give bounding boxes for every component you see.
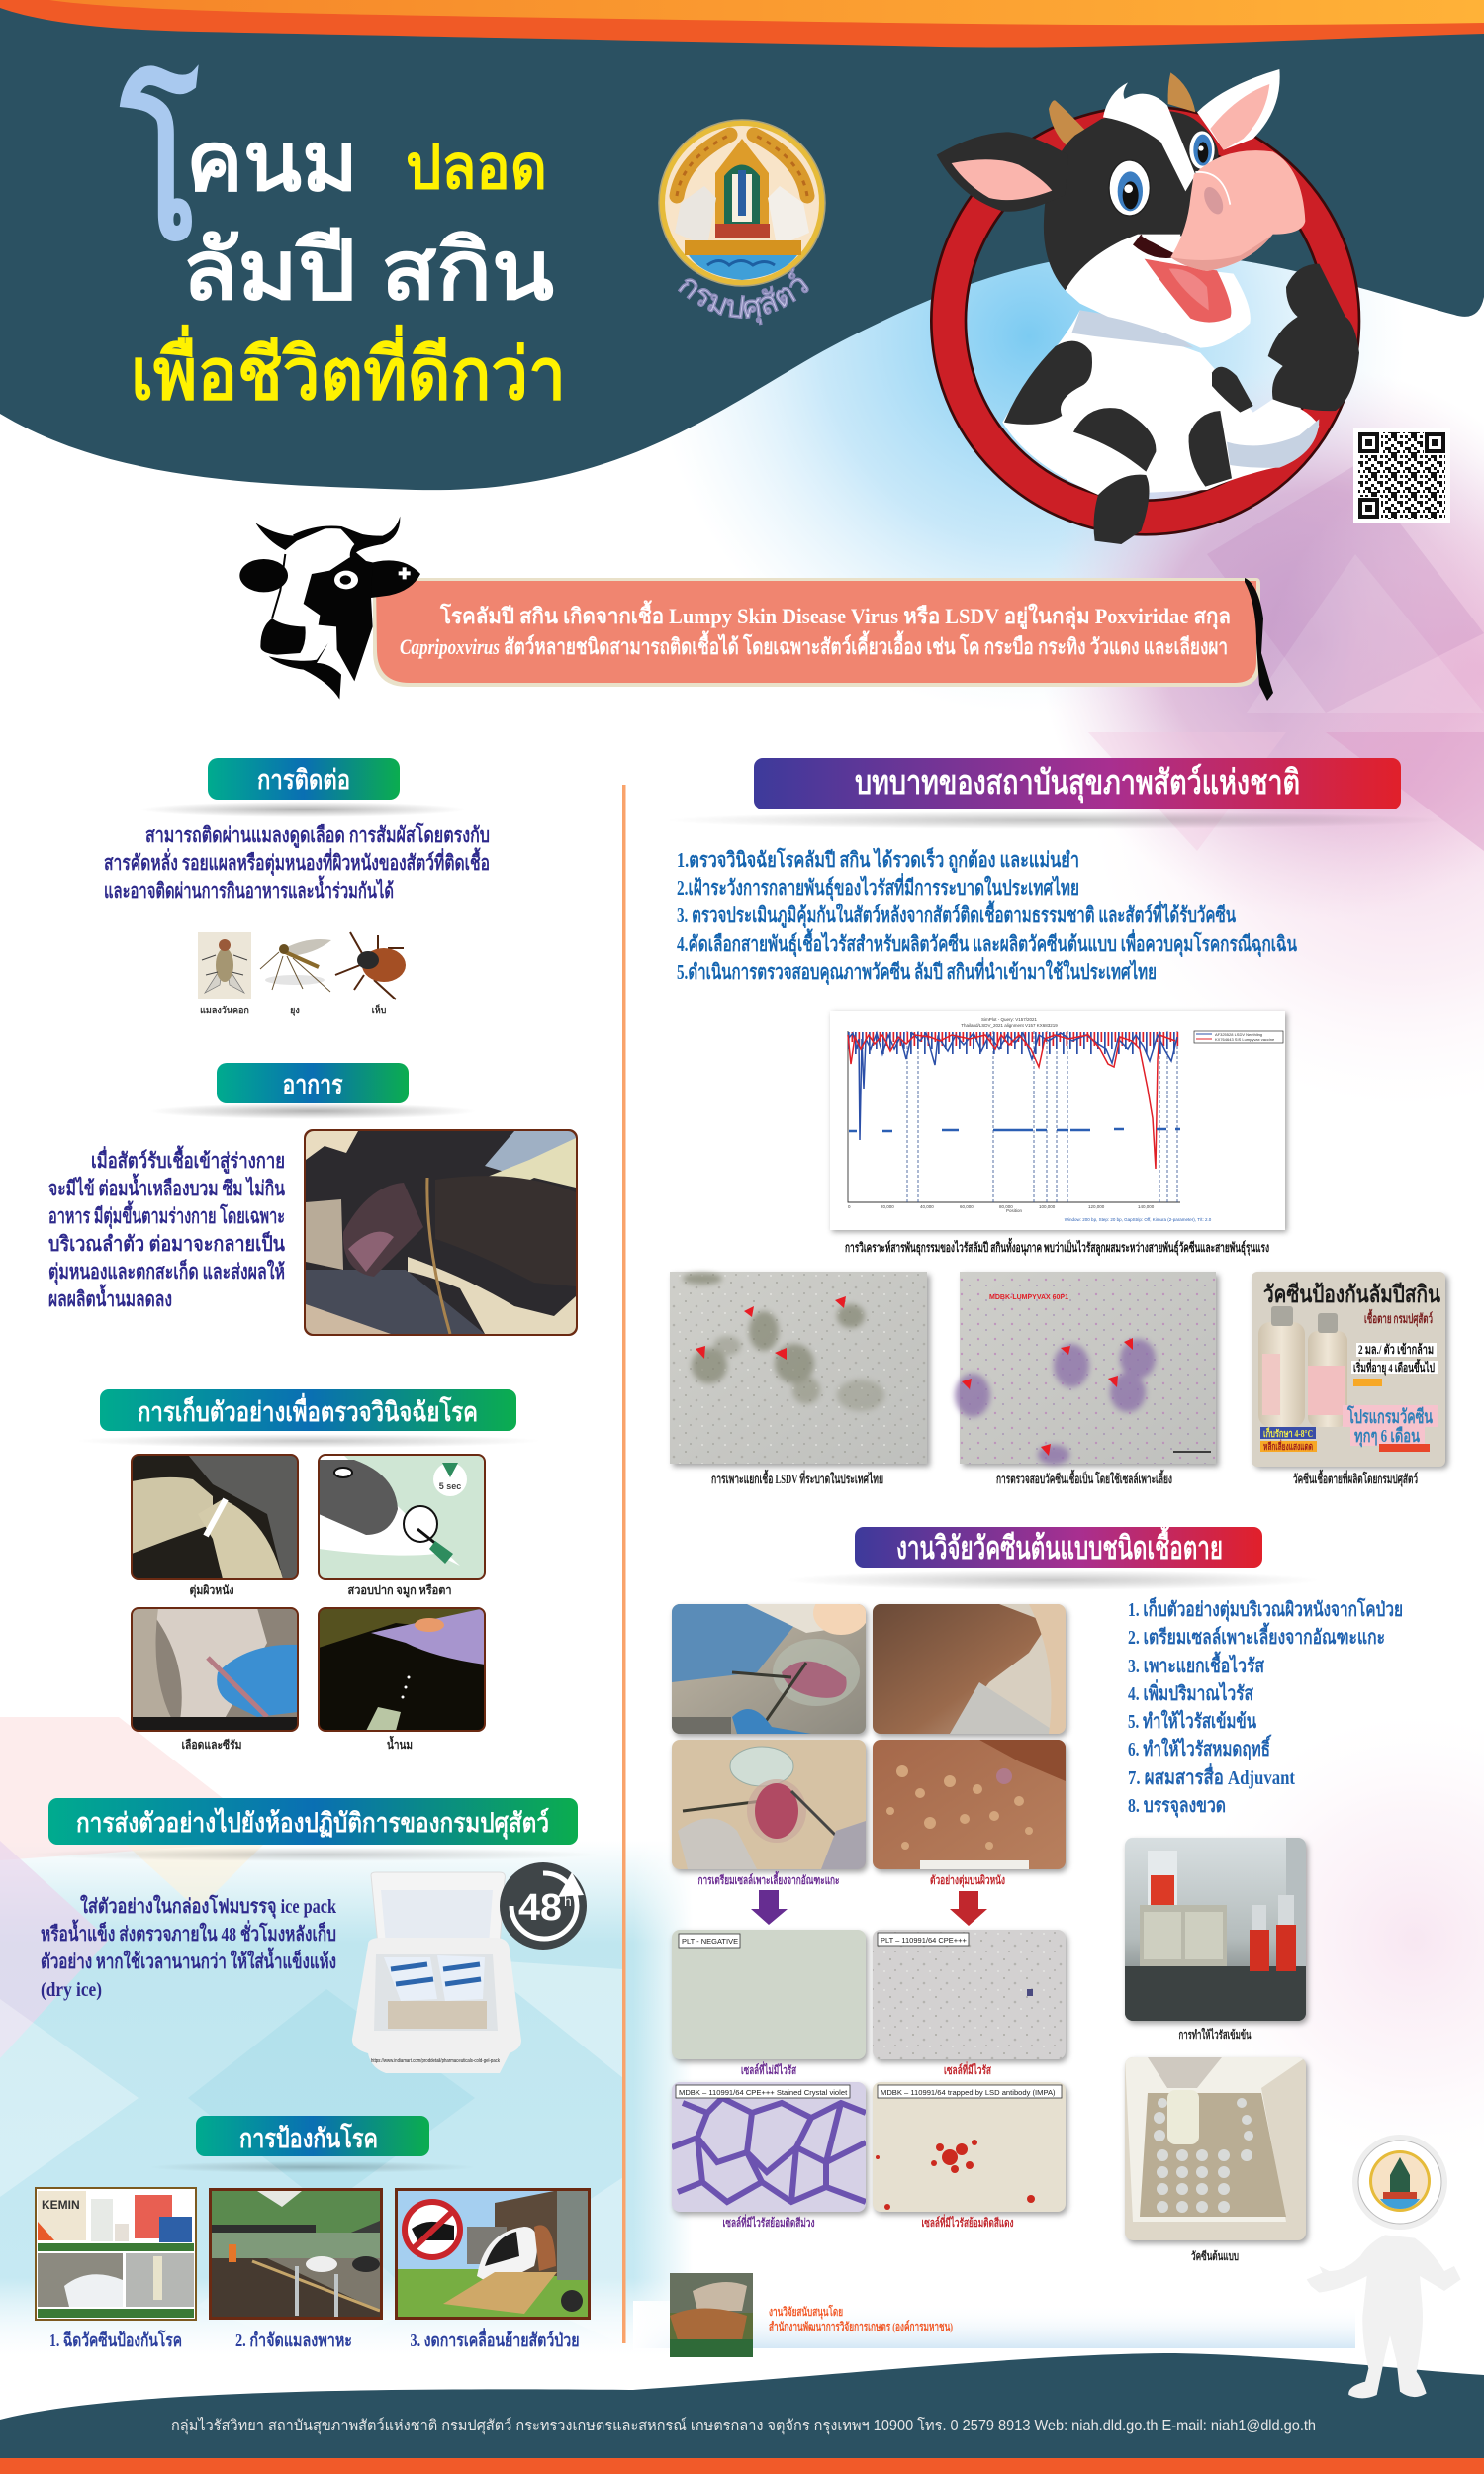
shipping text: (dry ice): [41, 1979, 102, 2001]
chart: axis labels: 60,000: [960, 1204, 974, 1209]
photo: PLT CPE cells: [873, 1930, 1066, 2059]
photo: inactivated vaccine poster: เริ่มที่อายุ 4 เดือนขึ้นไป: [1353, 1358, 1435, 1376]
heading: sample collection: [76, 1389, 541, 1448]
chart: genome similarity plot: [830, 1011, 1287, 1232]
photo: testis on dish with scissors: [672, 1740, 866, 1869]
chart: legend: AF325528 LSDV Neethling: [1215, 1032, 1262, 1037]
photo: inactivated vaccine poster: เก็บรักษา 4-8°C: [1263, 1426, 1313, 1440]
sample captions: เลือดและซีรัม: [182, 1738, 241, 1752]
photo: skin nodules close-up: [873, 1740, 1066, 1869]
shipping text: หรือน้ำแข็ง ส่งตรวจภายใน 48 ชั่วโมงหลังเก็บ: [41, 1919, 336, 1946]
research captions row 2: ตัวอย่างตุ่มบนผิวหนัง: [930, 1873, 1005, 1888]
micrograph captions: วัคซีนเชื้อตายที่ผลิตโดยกรมปศุสัตว์: [1293, 1469, 1418, 1487]
photo: IMPA stained cells: [873, 2082, 1066, 2212]
heading: transmission: [139, 758, 466, 817]
mascot head badge: [1352, 2135, 1447, 2230]
symptoms text: [48, 1145, 286, 1311]
chart: legend: [1194, 1031, 1283, 1043]
shipping text: [41, 1894, 337, 2001]
photo: inactivated vaccine poster: วัคซีนป้องกันลัมปีสกิน: [1263, 1282, 1440, 1308]
research step list: 1. เก็บตัวอย่างตุ่มบริเวณผิวหนังจากโคป่วย: [1128, 1596, 1403, 1622]
institute role list: 1.ตรวจวินิจฉัยโรคลัมปี สกิน ได้รวดเร็ว ถูกต้อง และแม่นยำ: [677, 846, 1079, 874]
insect captions: เห็บ: [372, 1003, 387, 1015]
chart: axis labels: 100,000: [1039, 1204, 1056, 1209]
icon: 48 hours clock: [500, 1862, 587, 1950]
sample captions: สวอบปาก จมูก หรือตา: [348, 1583, 451, 1598]
symptoms text: ผลผลิตน้ำนมลดลง: [48, 1284, 172, 1311]
icon: tick: [335, 932, 406, 999]
research captions row 4: เซลล์ที่มีไวรัสย้อมติดสีแดง: [922, 2214, 1014, 2230]
photo: PLT negative cells: [672, 1930, 866, 2059]
photo: vaccine CPE micrograph: [955, 1272, 1219, 1467]
title: ปลอด: ปลอด: [406, 134, 547, 202]
cow hoof: [1094, 475, 1150, 544]
micrograph captions: [711, 1469, 1418, 1487]
photo: sick cow with nodules: [873, 1604, 1066, 1734]
chart: legend: KX764643 SIS Lumpyvax vaccine: [1215, 1037, 1275, 1042]
photo: inactivated vaccine poster: [1252, 1272, 1448, 1469]
funding note: [769, 2304, 953, 2333]
sample captions: ตุ่มผิวหนัง: [190, 1583, 234, 1598]
footer: [0, 2353, 1484, 2474]
title: large letter โ: โ: [119, 63, 200, 277]
research step list: 5. ทำให้ไวรัสเข้มข้น: [1128, 1709, 1256, 1733]
photo: inactivated vaccine poster: เชื้อตาย กรมปศุสัตว์: [1364, 1308, 1433, 1327]
red arrows: [696, 1296, 846, 1360]
panel text line 1: โรคลัมปี สกิน เกิดจากเชื้อ Lumpy Skin Disease Virus หรือ LSDV อยู่ในกลุ่ม Poxviridae สกุล: [439, 600, 1231, 630]
photo: inactivated vaccine poster: หลีกเลี่ยงแสงแดด: [1263, 1439, 1313, 1453]
insect captions: แมลงวันคอก: [200, 1005, 249, 1015]
transmission text: สารคัดหลั่ง รอยแผลหรือตุ่มหนองที่ผิวหนังของสัตว์ที่ติดเชื้อ: [104, 847, 490, 877]
cow hand thumbs up: [1268, 264, 1359, 411]
institute role list: 5.ดำเนินการตรวจสอบคุณภาพวัคซีน ลัมปี สกินที่นำเข้ามาใช้ในประเทศไทย: [677, 956, 1157, 986]
panel: sample collection: [76, 1389, 541, 1752]
photo: PLT CPE cells: PLT – 110991/64 CPE+++: [881, 1936, 968, 1945]
chart: blue segments: [849, 1129, 1180, 1131]
research step list: 7. ผสมสารสื่อ Adjuvant: [1128, 1762, 1295, 1789]
cow chest and chin: [1066, 235, 1251, 348]
prevention captions: 3. งดการเคลื่อนย้ายสัตว์ป่วย: [410, 2328, 580, 2350]
photo: vaccine products: KEMIN: [42, 2198, 80, 2212]
icon: 48 hours clock: h: [564, 1893, 572, 1909]
research captions row 2: การเตรียมเซลล์เพาะเลี้ยงจากอัณฑะแกะ: [698, 1870, 839, 1887]
chart: axis labels: [848, 1017, 1212, 1222]
photo: insect control at farm: [209, 2188, 383, 2320]
heading: vaccine research: [786, 1524, 1320, 1590]
photo: foam box: [352, 1872, 521, 2073]
chart: axis labels: SimPlot - Query: V157/2021: [981, 1017, 1038, 1022]
institute role list: 3. ตรวจประเมินภูมิคุ้มกันในสัตว์หลังจากสัตว์ติดเชื้อตามธรรมชาติ และสัตว์ที่ได้รับวัคซีน: [677, 900, 1236, 929]
chart: dense similarity trace band: [848, 1032, 1180, 1058]
chart: axis labels: Window: 200 bp, Step: 20 bp, GapStrip: Off, Kimura (2-parameter), T/t: 2.0: [1065, 1217, 1212, 1222]
photo: inactivated vaccine poster: ทุกๆ 6 เดือน: [1354, 1426, 1421, 1448]
chart: axis labels: 140,000: [1138, 1204, 1155, 1209]
photo: swab diagram: [319, 1455, 485, 1579]
caption: virus concentration: การทำให้ไวรัสเข้มข้น: [1179, 2027, 1252, 2042]
heading: shipping: การส่งตัวอย่างไปยังห้องปฏิบัติการของกรมปศุสัตว์: [76, 1807, 549, 1840]
icon: fly: [198, 932, 251, 999]
cow left ear: [937, 132, 1068, 212]
photo: crystal violet stained cells: [672, 2082, 866, 2212]
research captions row 4: เซลล์ที่มีไวรัสย้อมติดสีม่วง: [722, 2214, 815, 2230]
insect captions: ยุง: [290, 1005, 300, 1016]
chart: axis labels: Thailand/LSDV_2021 alignment V157 KX683219: [961, 1023, 1058, 1028]
photo: milk sample: [319, 1608, 485, 1731]
photo: inactivated vaccine poster: โปรแกรมวัคซีน: [1346, 1405, 1433, 1428]
symptoms text: จะมีไข้ ต่อมน้ำเหลืองบวม ซึม ไม่กิน: [48, 1173, 285, 1200]
shipping text: ใส่ตัวอย่างในกล่องโฟมบรรจุ ice pack: [80, 1894, 337, 1919]
heading: symptoms: [149, 1063, 476, 1119]
photo: swab diagram: 5 sec: [439, 1481, 461, 1491]
chart: vertical markers: [907, 1031, 1177, 1202]
chart: axis labels: 20,000: [881, 1204, 894, 1209]
panel: inactivated vaccine research: [670, 1524, 1403, 2357]
symptoms text: บริเวณลำตัว ต่อมาจะกลายเป็น: [48, 1230, 286, 1256]
photo: prototype vaccine vials: [1125, 2057, 1306, 2240]
chart: axis labels: 120,000: [1088, 1204, 1105, 1209]
cow horns: [1049, 72, 1195, 151]
logo: arc text: กรมปศุสัตว์: [678, 267, 809, 325]
photo: vaccine CPE micrograph: MDBK-LUMPYVAX 60P1: [989, 1294, 1068, 1301]
mascot body: [1307, 2235, 1461, 2398]
header: orange band: [0, 0, 1484, 48]
institute role list: 2.เฝ้าระวังการกลายพันธุ์ของไวรัสที่มีการระบาดในประเทศไทย: [677, 872, 1079, 902]
icon: mosquito: [260, 939, 331, 992]
salmon text panel: [373, 578, 1260, 687]
heading: symptoms: อาการ: [283, 1070, 343, 1099]
shipping text: ตัวอย่าง หากใช้เวลานานกว่า ให้ใส่น้ำแข็งแห้ง: [41, 1947, 336, 1973]
photo: blood collection: [132, 1608, 298, 1731]
research step list: 2. เตรียมเซลล์เพาะเลี้ยงจากอัณฑะแกะ: [1128, 1622, 1385, 1649]
vaccine bottles: [1258, 1306, 1347, 1427]
funding note: งานวิจัยสนับสนุนโดย: [769, 2304, 843, 2320]
arrow: purple down: [751, 1890, 788, 1925]
intro panel with cow silhouette: [239, 517, 1273, 701]
research step list: 6. ทำให้ไวรัสหมดฤทธิ์: [1128, 1734, 1272, 1760]
cow body: [1002, 310, 1319, 495]
heading: transmission: การติดต่อ: [257, 765, 350, 795]
symptoms text: อาหาร มีตุ่มขึ้นตามร่างกาย โดยเฉพาะ: [48, 1200, 285, 1230]
title: ลัมปี สกิน: ลัมปี สกิน: [182, 224, 554, 317]
photo: inactivated vaccine poster: 2 มล./ ตัว เข้ากล้าม: [1358, 1342, 1434, 1357]
research captions row 3: เซลล์ที่มีไวรัส: [944, 2061, 991, 2077]
transmission text: สามารถติดผ่านแมลงดูดเลือด การสัมผัสโดยตรงกับ: [145, 822, 490, 849]
cow tongue and mouth: [1133, 235, 1231, 323]
vertical divider: [622, 785, 625, 2343]
panel text line 2: Capripoxvirus สัตว์หลายชนิดสามารถติดเชื้อได้ โดยเฉพาะสัตว์เคี้ยวเอื้อง เช่น โค กระบือ กระทิง วัวแดง และเลียงผา: [400, 630, 1228, 659]
heading: institute role: [666, 758, 1447, 829]
caption: prototype vaccine: วัคซีนต้นแบบ: [1191, 2249, 1239, 2263]
photo: IMPA stained cells: MDBK – 110991/64 trapped by LSD antibody (IMPA): [881, 2088, 1056, 2097]
micrograph captions: การตรวจสอบวัคซีนเชื้อเป็น โดยใช้เซลล์เพาะเลี้ยง: [996, 1469, 1172, 1486]
research captions row 3: เซลล์ที่ไม่มีไวรัส: [741, 2061, 796, 2077]
photo frames: [132, 1455, 485, 1731]
photo: virus concentration equipment: [1125, 1838, 1306, 2021]
photo: foam box: https://www.indiamart.com/proddetail/pharmaceuticals-cold-gel-pack: [371, 2058, 500, 2064]
symptoms text: ตุ่มหนองและตกสะเก็ด และส่งผลให้: [48, 1258, 285, 1285]
research step list: 4. เพิ่มปริมาณไวรัส: [1128, 1678, 1254, 1705]
cow forehead blaze: [1103, 82, 1195, 191]
chart: blue series: [848, 1033, 1177, 1140]
arrow: red down: [950, 1891, 987, 1926]
panel: symptoms: [48, 1063, 578, 1336]
chart: axis labels: 0: [848, 1204, 851, 1209]
title: เพื่อชีวิตที่ดีกว่า: เพื่อชีวิตที่ดีกว่า: [131, 324, 566, 415]
transmission text: และอาจติดผ่านการกินอาหารและน้ำร่วมกันได้: [104, 875, 394, 903]
heading: prevention: [149, 2116, 476, 2173]
photo: virus isolation micrograph: [670, 1272, 930, 1467]
photo: crystal violet stained cells: MDBK – 110991/64 CPE+++ Stained Crystal violet: [679, 2088, 848, 2097]
logo: department of livestock seal: [658, 119, 826, 325]
chart: axis labels: Position: [1006, 1208, 1022, 1213]
sample captions: น้ำนม: [387, 1735, 413, 1752]
heading: institute role: บทบาทของสถาบันสุขภาพสัตว์แห่งชาติ: [855, 763, 1300, 804]
research captions row 2: [698, 1870, 1005, 1888]
photo shadows: [674, 1607, 1308, 2243]
red ring: [949, 124, 1343, 518]
photo: PLT negative cells: PLT - NEGATIVE: [682, 1937, 738, 1946]
cow snout: [1170, 150, 1305, 271]
chart: axis labels: 80,000: [999, 1204, 1013, 1209]
icon: 48 hours clock: 48: [518, 1887, 562, 1929]
sample captions: [182, 1583, 451, 1752]
mascot with logo head: [1307, 2135, 1461, 2398]
header: dark teal wave: [0, 0, 1484, 490]
footer contact text: กลุ่มไวรัสวิทยา สถาบันสุขภาพสัตว์แห่งชาติ กรมปศุสัตว์ กระทรวงเกษตรและสหกรณ์ เกษตรกลาง จตุจักร กรุงเทพฯ 10900 โทร. 0 2579 8913 Web: niah.dld.go.th E-mail: niah1@dld.go.th: [171, 2417, 1316, 2435]
cow right ear: [1197, 69, 1280, 150]
panel: role of the institute: [666, 758, 1448, 1487]
prevention captions: 1. ฉีดวัคซีนป้องกันโรค: [49, 2330, 182, 2350]
chart: red series: [848, 1035, 1175, 1169]
prevention captions: [49, 2328, 580, 2350]
transmission text: [104, 822, 490, 903]
cow head: [1044, 111, 1219, 290]
heading: sample collection: การเก็บตัวอย่างเพื่อตรวจวินิจฉัยโรค: [138, 1392, 478, 1427]
symptoms text: เมื่อสัตว์รับเชื้อเข้าสู่ร่างกาย: [91, 1145, 285, 1175]
title: [119, 63, 566, 415]
insect captions: [200, 1003, 387, 1016]
heading: vaccine research: งานวิจัยวัคซีนต้นแบบชนิดเชื้อตาย: [896, 1524, 1223, 1566]
photo: vaccine products: [36, 2188, 196, 2320]
research captions row 4: [722, 2214, 1014, 2230]
panel: prevention: [36, 2116, 591, 2350]
photo: funding cover: [670, 2273, 753, 2357]
research captions row 3: [741, 2061, 991, 2077]
research step list: [1128, 1596, 1403, 1818]
photo: testis dissection in petri dish: [672, 1604, 866, 1734]
research step list: 3. เพาะแยกเชื้อไวรัส: [1128, 1651, 1265, 1677]
heading: shipping: [26, 1798, 600, 1861]
QR code: [1353, 428, 1450, 523]
institute role list: [677, 846, 1297, 986]
prevention captions: 2. กำจัดแมลงพาหะ: [235, 2331, 352, 2350]
funding note: สำนักงานพัฒนาการวิจัยการเกษตร (องค์การมหาชน): [769, 2320, 953, 2333]
cow silhouette head: [239, 517, 420, 700]
panel: shipping samples: [26, 1798, 600, 2073]
panel: transmission: [104, 758, 490, 1016]
photo: infected cow: [304, 1129, 578, 1336]
micrograph captions: การเพาะแยกเชื้อ LSDV ที่ระบาดในประเทศไทย: [711, 1469, 883, 1486]
cow silhouette tail: [1245, 578, 1273, 701]
research step list: 8. บรรจุลงขวด: [1128, 1795, 1226, 1818]
cow eyes: [1109, 131, 1215, 216]
chart: axis labels: 40,000: [920, 1204, 934, 1209]
heading: prevention: การป้องกันโรค: [239, 2122, 378, 2153]
title: คนม: คนม: [186, 115, 358, 208]
photo: restrict animal movement: [395, 2188, 591, 2320]
cow mascot in red ring: [937, 69, 1359, 544]
photo: skin nodule sampling: [132, 1455, 298, 1579]
